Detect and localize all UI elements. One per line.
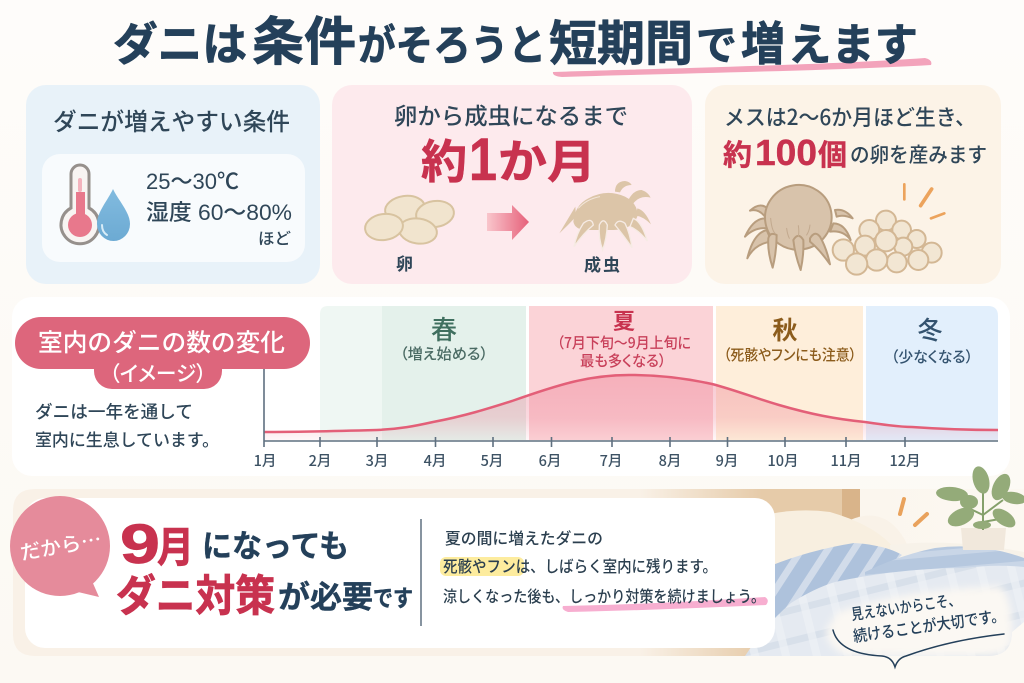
note background xyxy=(826,586,1012,656)
plant xyxy=(935,464,1024,550)
main message: です xyxy=(373,585,413,611)
area under curve xyxy=(264,375,998,441)
handwritten note xyxy=(833,591,1006,667)
month labels: 11月 xyxy=(830,450,862,471)
title: ダニは xyxy=(113,19,247,70)
spring label: （増え始める） xyxy=(400,343,488,364)
explanation text: 涼しくなった後も、しっかり対策を続けましょう。 xyxy=(443,588,765,606)
spring label: 春 xyxy=(431,310,457,347)
month labels: 5月 xyxy=(481,450,503,471)
conditions text: 湿度 60～80% xyxy=(146,200,292,225)
inner card xyxy=(42,154,305,262)
lifespan text: メスは2～6か月ほど生き、 xyxy=(724,101,976,132)
summer label xyxy=(557,304,691,371)
highlight: pink underline xyxy=(563,597,768,612)
pillow xyxy=(774,510,852,564)
100 eggs text: の卵を産みます xyxy=(850,138,987,168)
speech bubble: だから… xyxy=(18,523,103,566)
panel heading: 卵から成虫になるまで xyxy=(394,97,628,131)
season band: winter xyxy=(866,306,998,440)
icon: mite xyxy=(745,180,853,270)
winter label xyxy=(891,311,973,367)
title: 増 xyxy=(741,18,785,70)
chart title pill xyxy=(15,317,310,389)
highlight: yellow xyxy=(440,557,524,576)
month labels: 8月 xyxy=(659,450,681,471)
chart title pill: （イメージ） xyxy=(110,358,206,388)
egg label: 卵 xyxy=(396,250,413,275)
winter label: 冬 xyxy=(917,311,943,347)
panel heading: ダニが増えやすい条件 xyxy=(53,102,290,137)
adult label: 成虫 xyxy=(584,251,620,276)
100 eggs text: 100 xyxy=(755,132,817,173)
icon: accent ticks xyxy=(900,499,927,525)
note bubble line xyxy=(833,630,1004,667)
chart title pill: 室内のダニの数の変化 xyxy=(38,324,285,359)
explanation text xyxy=(443,529,765,606)
season band: autumn xyxy=(716,306,863,440)
spring label xyxy=(400,310,488,364)
axes xyxy=(264,368,998,447)
season band: early spring xyxy=(320,306,382,440)
back pillow xyxy=(852,516,860,523)
month labels xyxy=(254,450,921,471)
icon: water drop xyxy=(97,189,130,241)
title: えます xyxy=(788,21,918,70)
handwritten note: 見えないからこそ、 xyxy=(850,591,961,624)
main message: が必 xyxy=(278,580,342,615)
autumn label: 秋 xyxy=(772,311,798,347)
blue pillow blanket xyxy=(775,543,902,618)
autumn label xyxy=(724,311,856,365)
panel: female lifespan xyxy=(705,85,1001,284)
winter label: （少なくなる） xyxy=(891,346,973,367)
month labels: 12月 xyxy=(889,450,921,471)
speech bubble xyxy=(10,496,110,597)
main message: 要 xyxy=(342,580,373,615)
divider xyxy=(420,519,422,626)
title: 条件 xyxy=(252,14,356,72)
conditions text: ほど xyxy=(258,230,291,248)
explanation text: 夏の間に増えたダニの xyxy=(445,529,603,548)
panel: call to action background with bedroom xyxy=(13,489,1024,656)
panel: egg to adult xyxy=(332,85,692,284)
title: がそろうと xyxy=(358,22,546,69)
100 eggs text: 約 xyxy=(723,139,752,172)
chart description: ダニは一年を通して xyxy=(35,402,193,422)
panel: seasonal chart xyxy=(12,297,1010,476)
month labels: 10月 xyxy=(767,450,799,471)
month labels: 7月 xyxy=(600,450,622,471)
autumn label: （死骸やフンにも注意） xyxy=(724,344,856,365)
100 eggs text: 個 xyxy=(818,139,847,172)
mattress sheet xyxy=(890,545,894,550)
main message xyxy=(116,512,413,621)
month labels: 1月 xyxy=(254,450,276,471)
handwritten note: 続けることが大切です。 xyxy=(852,606,1006,646)
light duvet xyxy=(745,566,1024,656)
curve xyxy=(264,375,998,432)
big number xyxy=(421,126,596,193)
season band: spring xyxy=(382,306,526,440)
icon: egg cluster xyxy=(833,211,942,275)
icon: eggs xyxy=(363,193,456,246)
title: 短期間 xyxy=(549,18,693,71)
month labels: 9月 xyxy=(716,450,738,471)
headboard slat xyxy=(842,489,860,520)
conditions text xyxy=(146,169,292,248)
arrow xyxy=(487,205,529,240)
title xyxy=(113,14,931,77)
big number: か月 xyxy=(498,136,596,188)
chart description xyxy=(35,402,219,450)
main message: 月 xyxy=(157,524,194,571)
summer label: 最も多くなる） xyxy=(580,350,666,371)
month labels: 3月 xyxy=(366,450,388,471)
big number: 1 xyxy=(469,126,497,193)
blue duvet back xyxy=(865,546,1024,576)
title highlight brush xyxy=(553,58,931,77)
panel: conditions xyxy=(26,85,320,284)
chart description: 室内に生息しています。 xyxy=(35,431,219,450)
100 eggs text xyxy=(723,132,987,173)
explanation text: 死骸やフンは、しばらく室内に残ります。 xyxy=(443,557,717,576)
panel: message card xyxy=(10,496,775,648)
summer label: 夏 xyxy=(613,304,635,336)
conditions text: 25～30℃ xyxy=(146,169,239,194)
season band: summer xyxy=(529,306,713,440)
title: で xyxy=(696,22,737,69)
icon: thermometer xyxy=(61,165,99,244)
icon: adult mite xyxy=(559,181,651,250)
main message: になっても xyxy=(202,529,349,564)
big number: 約 xyxy=(421,136,467,188)
main message: 9 xyxy=(120,512,160,575)
month labels: 4月 xyxy=(424,450,446,471)
month labels: 6月 xyxy=(539,450,561,471)
main message: ダニ対策 xyxy=(116,573,275,621)
summer label: （7月下旬～9月上旬に xyxy=(557,332,691,353)
month labels: 2月 xyxy=(309,450,331,471)
icon: sparkle ticks xyxy=(904,184,944,218)
